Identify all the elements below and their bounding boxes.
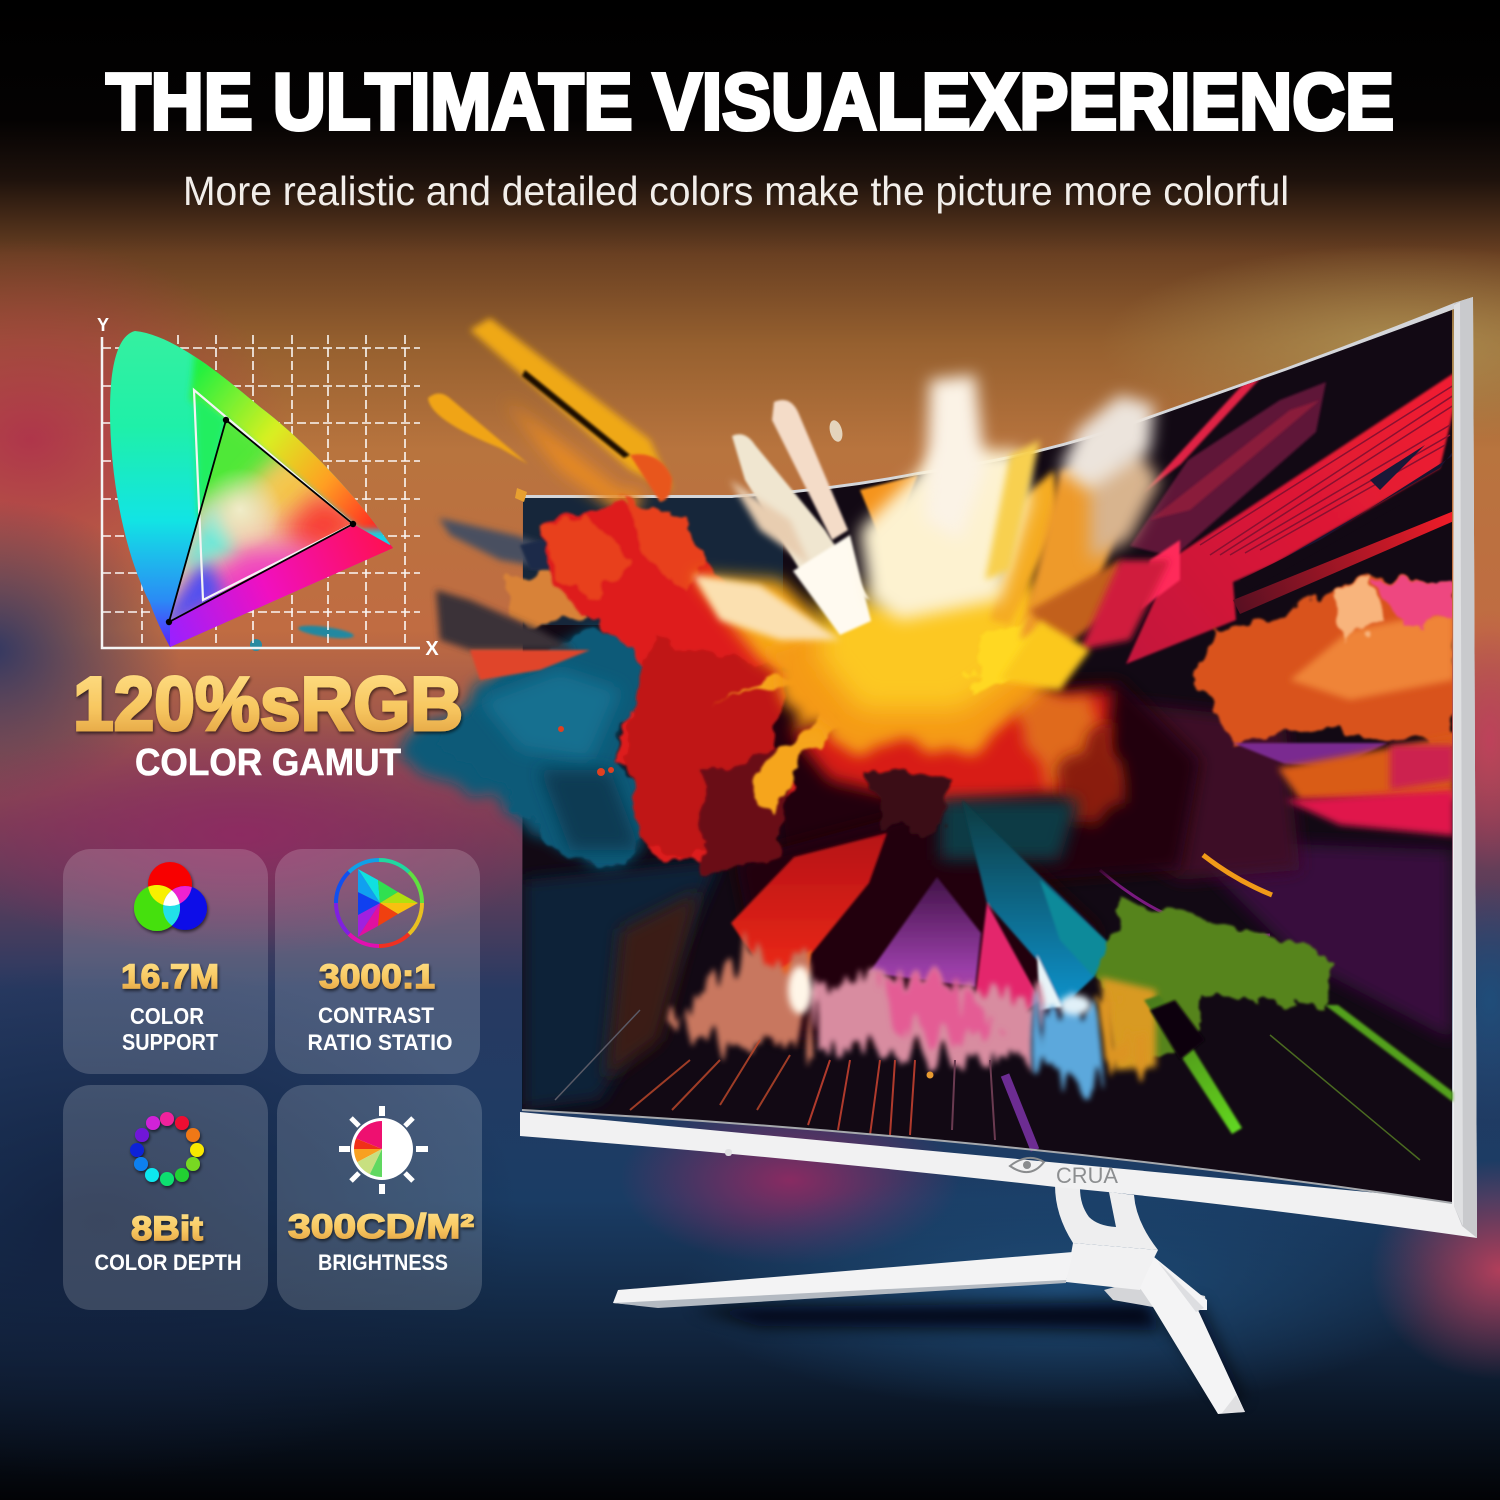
crimson streaks (1126, 357, 1454, 664)
maroon brush (1130, 382, 1326, 557)
icon: rgb circles (134, 862, 207, 931)
gamut headline (73, 662, 463, 784)
gamut chart (97, 315, 439, 660)
panel: 16.7M color support: 16.7M (121, 958, 219, 996)
gamut headline: COLOR GAMUT (135, 742, 401, 784)
title: THE ULTIMATE VISUALEXPERIENCE (106, 57, 1394, 146)
panel: 16.7M color support (63, 849, 268, 1074)
panel: 8bit color depth: COLOR DEPTH (94, 1250, 242, 1275)
colour horseshoe (110, 331, 400, 655)
icon: sun with colour wedge (339, 1106, 428, 1194)
screen lower right purple (1214, 838, 1452, 1040)
inner gamut triangle (170, 422, 350, 620)
subtitle: More realistic and detailed colors make the picture more colorful (183, 168, 1289, 214)
screen lower left (523, 860, 720, 1110)
panel: 16.7M color support: COLOR (130, 1003, 204, 1029)
panel: 3000:1 contrast ratio: 3000:1 (319, 958, 435, 996)
axes and dashed grid: Y (97, 315, 109, 335)
orange cloud (1192, 575, 1454, 836)
white fingers (730, 375, 1154, 635)
stand (613, 1185, 1245, 1414)
amber rays upper right (990, 440, 1170, 690)
panel: 8bit color depth (63, 1085, 268, 1310)
panel: 3000:1 contrast ratio: RATIO STATIO (308, 1030, 452, 1055)
screen bezel (520, 297, 1477, 1238)
under fan maroon (735, 800, 1100, 1040)
orange fire (790, 690, 1130, 860)
grey blue smear (436, 518, 590, 680)
red left mass (543, 500, 793, 870)
green and amber splash (1100, 900, 1453, 1160)
orange patch in top (860, 475, 918, 538)
drip lines and sparks (555, 1010, 1035, 1150)
dark core ground (760, 680, 1200, 880)
panel: 8bit color depth: 8Bit (131, 1210, 203, 1248)
teal splash (250, 623, 690, 860)
screen image (500, 290, 1470, 1220)
monitor (250, 290, 1477, 1414)
axes and dashed grid (97, 315, 439, 660)
panel: 300cd brightness (277, 1085, 482, 1310)
explosion (250, 318, 1453, 1160)
yellow body (693, 575, 1060, 750)
panel: 3000:1 contrast ratio: CONTRAST (318, 1003, 435, 1028)
panel: 3000:1 contrast ratio (275, 849, 480, 1074)
panel: 300cd brightness: 300CD/M² (288, 1208, 474, 1246)
monitor lower edge shade (522, 1110, 1452, 1203)
panel: 300cd brightness: BRIGHTNESS (318, 1250, 448, 1275)
logo (1010, 1158, 1118, 1188)
upper left streaks (428, 318, 672, 520)
lower fan (731, 800, 1119, 1033)
icon: play button ring (336, 860, 422, 946)
logo: CRUA (1056, 1163, 1118, 1188)
panel: 16.7M color support: SUPPORT (122, 1029, 218, 1055)
icon: colour dots ring (130, 1112, 204, 1186)
axes and dashed grid: X (425, 638, 439, 660)
peach and pink drips (670, 945, 1140, 1090)
gamut headline: 120%sRGB (73, 662, 463, 747)
purple and gold details (1100, 870, 1270, 935)
yellow jagged blob (714, 675, 850, 814)
